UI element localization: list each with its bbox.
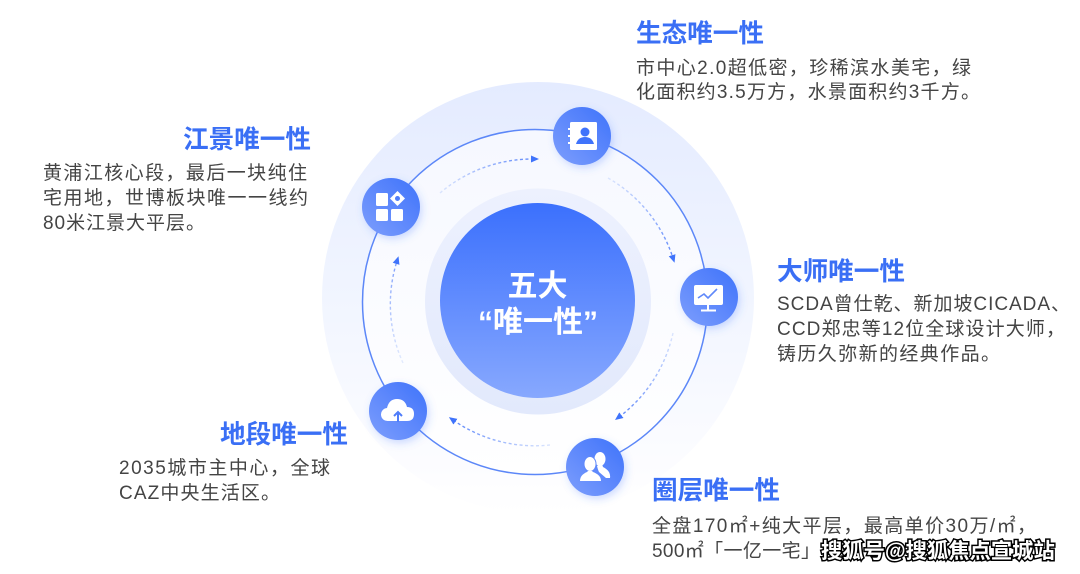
block: 江景唯一性 [43,125,311,234]
inner light disc [363,130,707,474]
block: 地段唯一性: 地段唯一性 [220,419,348,449]
block: 生态唯一性: 化面积约3.5万方，水景面积约3千方。 [636,81,980,103]
outer background disc [322,82,754,514]
block: 生态唯一性 [636,19,980,103]
block: 江景唯一性: 宅用地，世博板块唯一一线约 [43,187,308,209]
block: 生态唯一性: 市中心2.0超低密，珍稀滨水美宅，绿 [636,57,971,79]
icon: cloud upload [369,382,427,440]
dashed arrow: top left [440,159,534,193]
block: 圈层唯一性: 500㎡「一亿一宅」 [652,539,820,562]
icon: monitor chart [680,268,738,326]
dashed arrow: top right [608,178,673,258]
block: 圈层唯一性: 圈层唯一性 [652,476,780,505]
dashed arrow: bottom [453,420,550,446]
center disc [440,203,635,398]
block: 地段唯一性: 2035城市主中心，全球 [119,457,330,479]
block: 江景唯一性: 80米江景大平层。 [43,212,205,234]
block: 大师唯一性 [777,257,1070,365]
block: 大师唯一性: 铸历久弥新的经典作品。 [777,343,1000,365]
orbit ring [362,130,708,474]
block: 生态唯一性: 生态唯一性 [636,19,764,48]
block: 江景唯一性: 黄浦江核心段，最后一块纯住 [43,162,307,184]
block: 大师唯一性: 大师唯一性 [777,257,905,286]
block: 江景唯一性: 江景唯一性 [183,125,311,154]
center title: 五大 [508,270,568,303]
icon: contact book [553,107,611,165]
block: 地段唯一性: CAZ中央生活区。 [119,482,280,504]
icon: users [566,438,624,496]
center subtitle: “唯一性” [478,306,598,339]
block: 大师唯一性: SCDA曾仕乾、新加坡CICADA、 [777,293,1070,315]
icon: app grid [362,178,420,236]
block: 大师唯一性: CCD郑忠等12位全球设计大师， [777,318,1065,340]
center halo [425,188,651,414]
dashed arrow: bottom right [619,333,673,417]
block: 地段唯一性 [119,419,348,504]
watermark: 搜狐号@搜狐焦点宣城站 [821,539,1055,563]
block: 圈层唯一性 [652,476,1036,562]
dashed arrow: left [390,261,403,363]
block: 圈层唯一性: 全盘170㎡+纯大平层，最高单价30万/㎡， [652,514,1036,537]
